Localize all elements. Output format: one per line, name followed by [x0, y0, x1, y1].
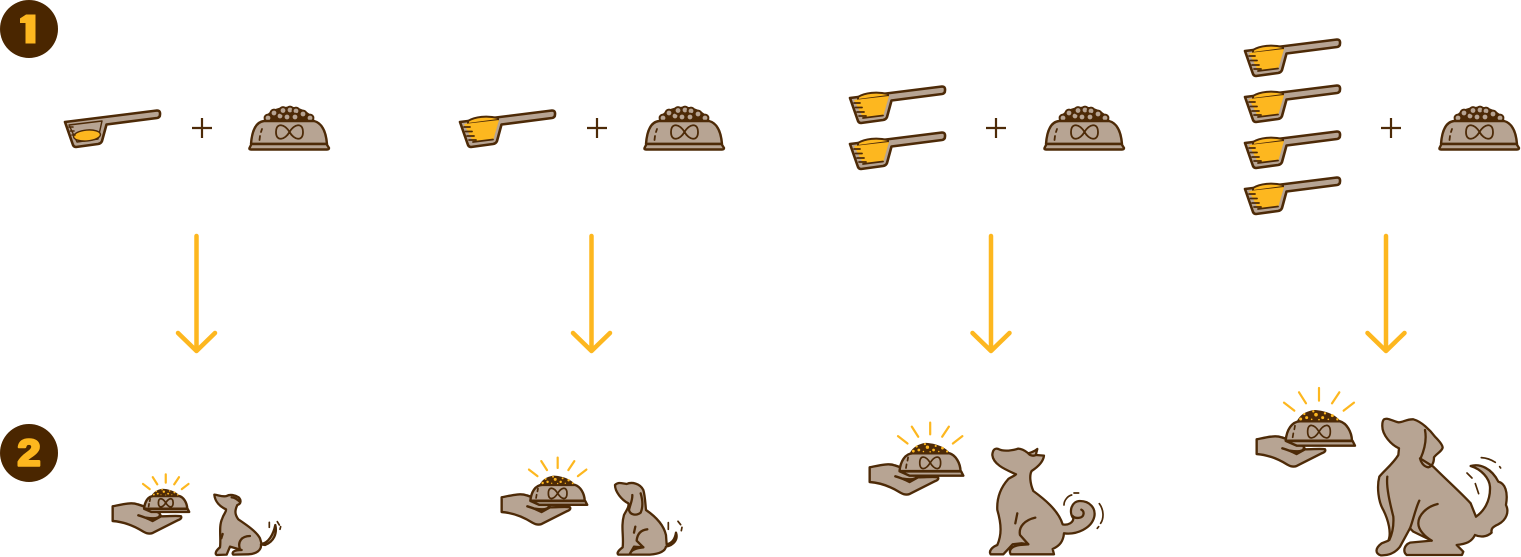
column 1 portion: partial scoop plus bowl [65, 107, 329, 150]
arrow column 4 [1368, 236, 1404, 351]
icon: scoop four [1245, 178, 1340, 214]
step badge 2 [0, 424, 58, 482]
icon: food bowl [644, 107, 724, 150]
column 3 portion: two scoops plus bowl [850, 86, 1124, 169]
icon: food bowl [1044, 107, 1124, 150]
icon: plus [192, 118, 212, 138]
icon: partial scoop [65, 110, 160, 147]
arrow column 2 [573, 236, 610, 351]
arrow column 3 [972, 236, 1010, 351]
icon: hand offering bowl, column 4 [1257, 388, 1355, 467]
icon: scoop two [1245, 86, 1340, 122]
icon: hand offering bowl, column 3 [870, 423, 963, 495]
icon: medium dog [615, 483, 682, 555]
step badge 1: 1 [19, 9, 41, 53]
column 2 portion: one scoop plus bowl [460, 107, 724, 150]
step badge 2: 2 [17, 433, 41, 474]
arrow column 1 [178, 236, 215, 351]
icon: food bowl [249, 107, 329, 150]
icon: small dog [214, 495, 281, 555]
icon: full scoop [460, 110, 555, 147]
icon: plus [587, 118, 607, 138]
icon: food bowl [1439, 107, 1519, 150]
icon: scoop one [1245, 40, 1340, 76]
icon: scoop one [850, 86, 945, 123]
step badge 1 [0, 0, 58, 58]
icon: hand offering bowl, column 2 [502, 458, 587, 525]
icon: scoop three [1245, 132, 1340, 168]
column 4 portion: four scoops plus bowl [1245, 40, 1519, 214]
icon: largest long-haired dog [1377, 419, 1507, 555]
icon: large curly-tailed dog [990, 449, 1103, 554]
icon: scoop two [850, 132, 945, 169]
icon: plus [986, 118, 1006, 138]
icon: plus [1381, 118, 1401, 138]
icon: hand offering bowl, column 1 [113, 474, 189, 534]
